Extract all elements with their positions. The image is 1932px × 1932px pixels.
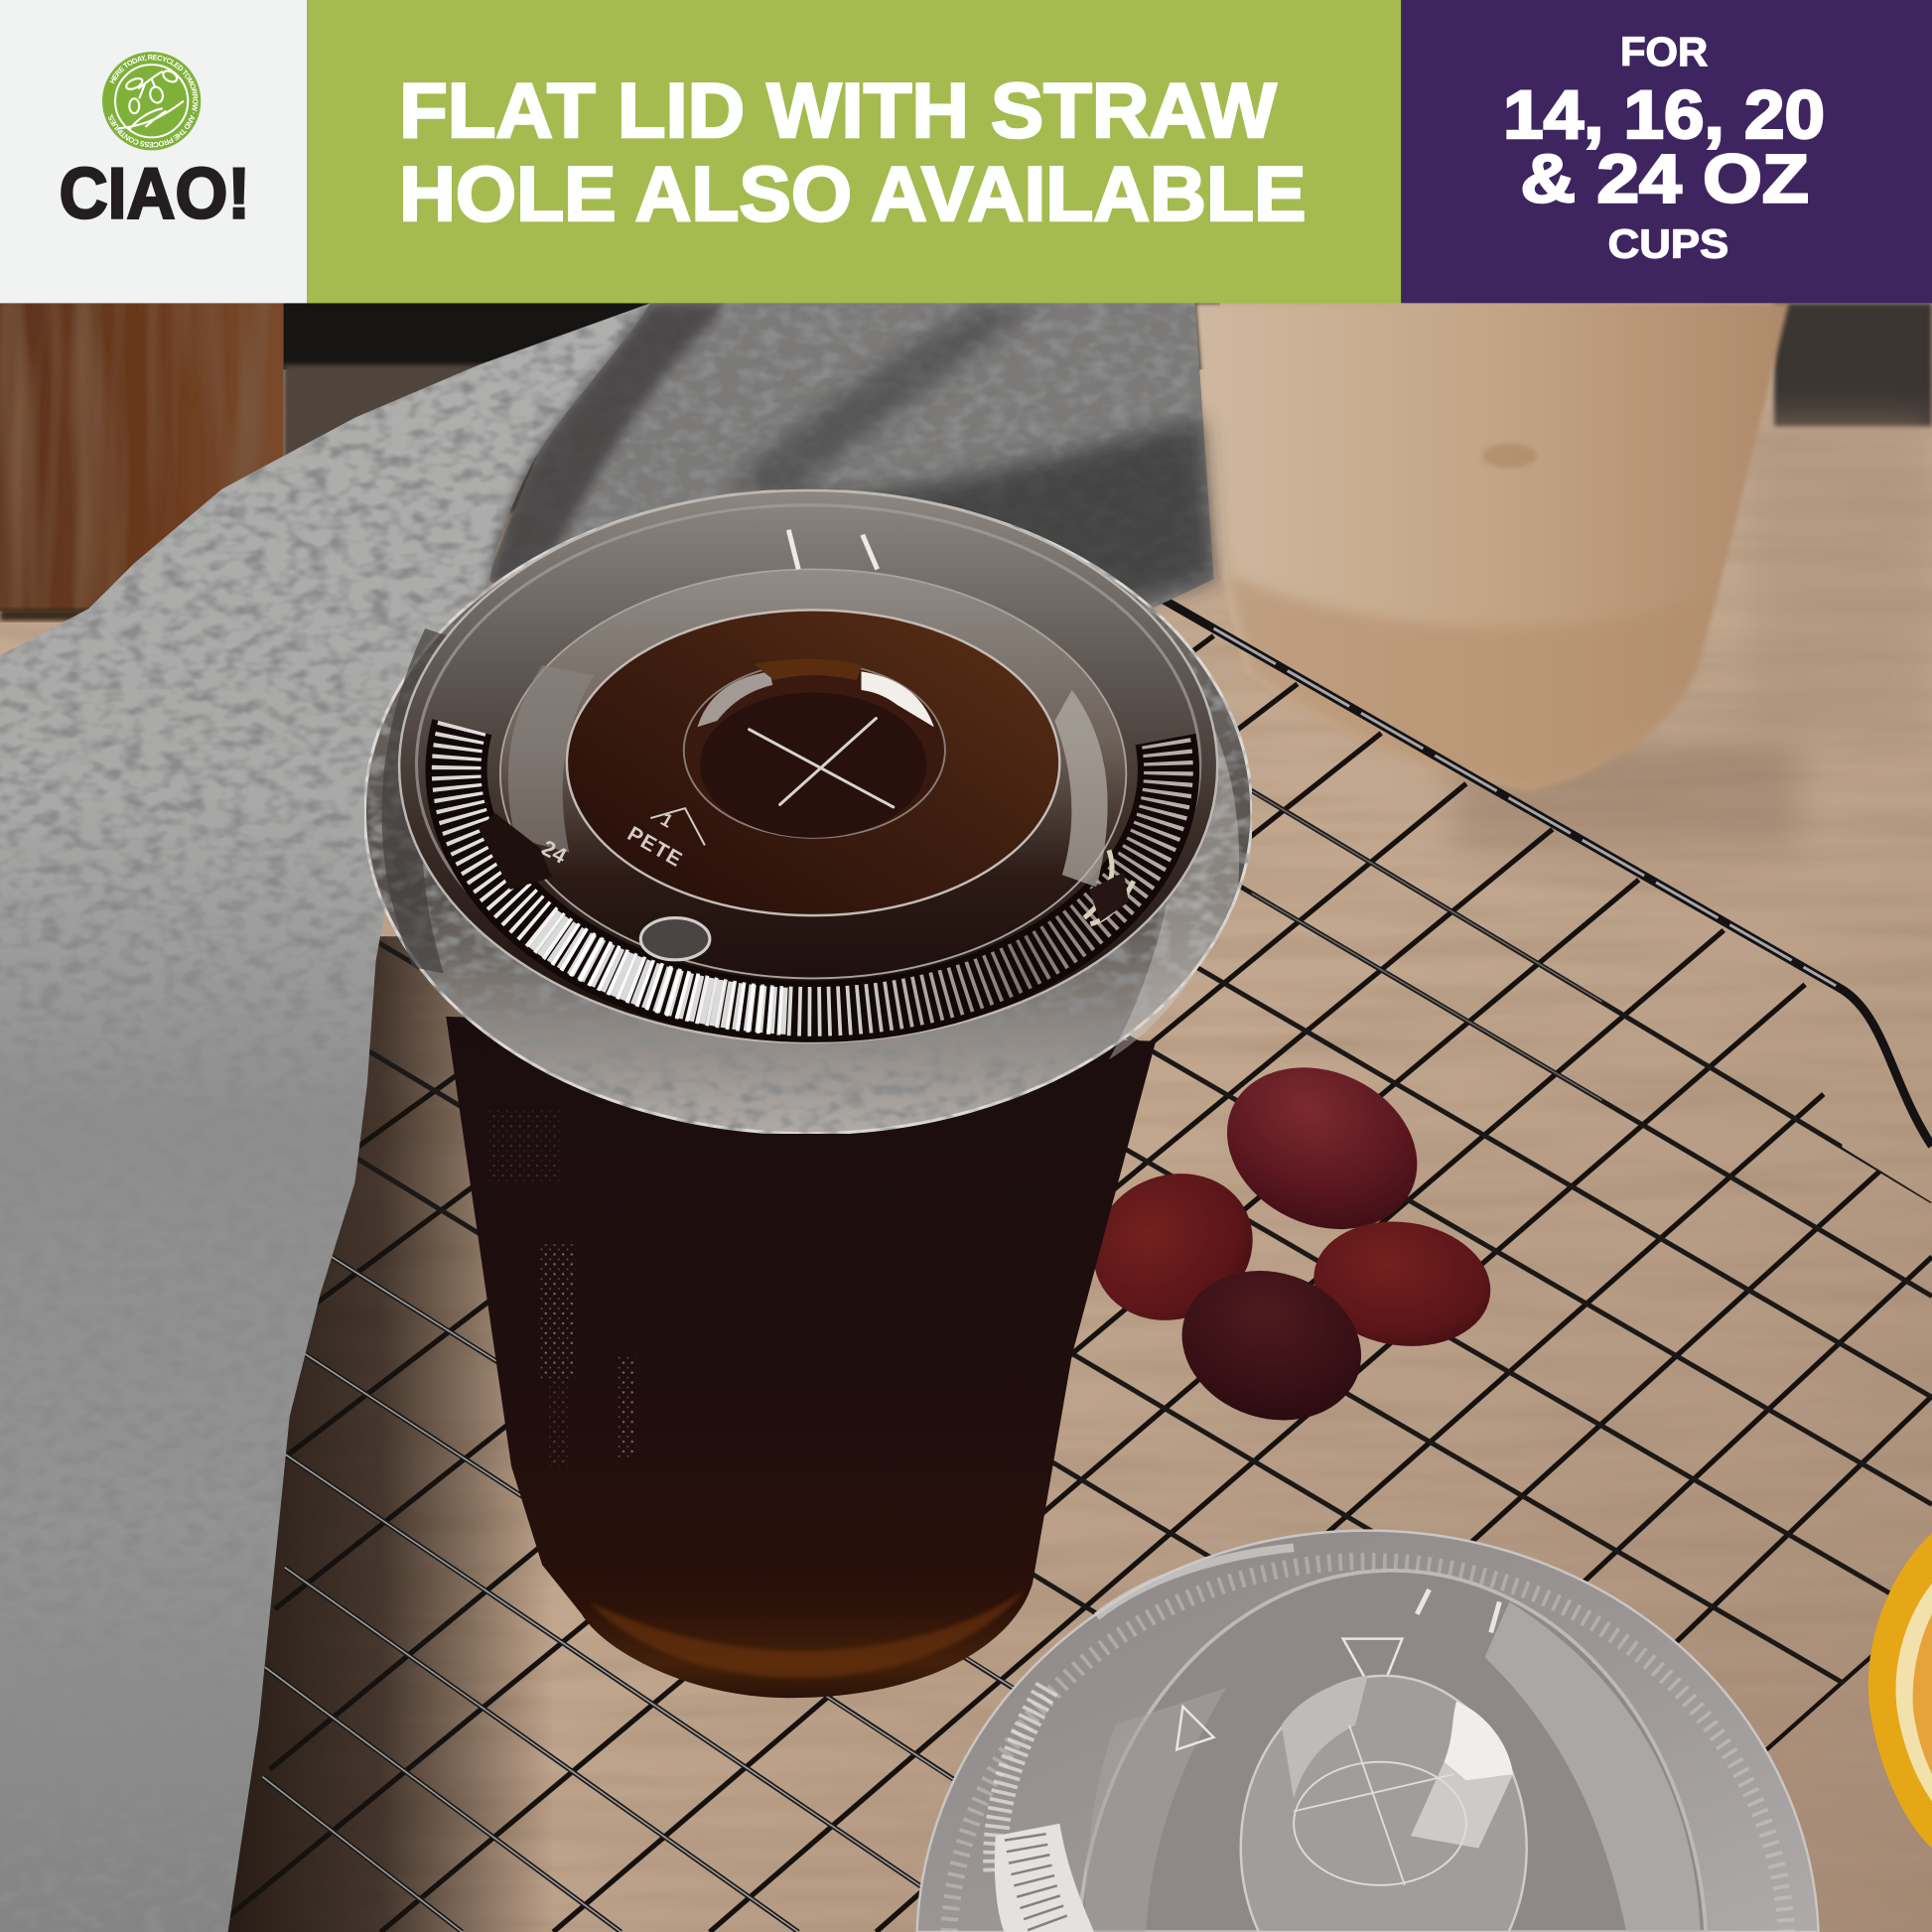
rack cross wires bbox=[229, 588, 1932, 1932]
recessed centre bbox=[1079, 1571, 1706, 1932]
straw dome bbox=[1241, 1676, 1527, 1932]
rack wire highlights bbox=[262, 791, 1601, 1932]
back towel shadow folds bbox=[727, 303, 1035, 505]
panel: cup sizes bbox=[1401, 0, 1932, 303]
right streaks bbox=[1484, 1601, 1701, 1932]
shadow beside the towel bbox=[209, 936, 554, 1932]
lid skirt bbox=[364, 490, 1252, 1134]
recycling mark: 1 bbox=[657, 808, 676, 832]
icon: recycling badge: HERE TODAY, RECYCLED TOMORROW · AND THE PROCESS CONTINUES. bbox=[108, 55, 199, 147]
rack long wires bbox=[261, 788, 1932, 1932]
towel fold shadow bbox=[487, 303, 727, 592]
ring right glare bbox=[1054, 690, 1108, 888]
ribbed channel bbox=[457, 727, 1169, 1012]
flat lid on the cup bbox=[364, 490, 1252, 1134]
lid skirt right glare bbox=[1084, 573, 1239, 1059]
rack outer frame and handle bbox=[1162, 599, 1932, 1146]
outer beaded rim bbox=[949, 1562, 1786, 1932]
straw dimple bbox=[684, 659, 945, 838]
ring left glare bbox=[508, 665, 594, 853]
second lid lying on the rack bbox=[917, 1531, 1819, 1932]
beige iced drink cup bbox=[1195, 303, 1789, 791]
label: cups: CUPS bbox=[1608, 220, 1728, 266]
cup of iced tea bbox=[446, 1017, 1156, 1698]
rim glare bbox=[1097, 1548, 1294, 1616]
headline line 1: FLAT LID WITH STRAW bbox=[399, 67, 1277, 154]
wooden block bbox=[0, 303, 286, 621]
grape right bbox=[1306, 1210, 1498, 1357]
grey knitted towel, front bbox=[0, 303, 650, 1932]
panel: logo bbox=[0, 0, 307, 304]
straw slit X bbox=[750, 719, 894, 807]
grey knitted towel, back fold bbox=[486, 303, 1213, 640]
recessed tea window bbox=[567, 610, 1059, 915]
dome slit lines bbox=[1294, 1725, 1466, 1885]
sizes line 2: & 24 OZ bbox=[1520, 142, 1809, 217]
lid marks bbox=[1176, 1589, 1499, 1749]
recycling mark: 24 bbox=[537, 835, 571, 869]
lid tab details bbox=[479, 530, 1134, 960]
wire cooling rack bbox=[230, 633, 1932, 1932]
header band bbox=[0, 0, 1932, 304]
ribbed edge bbox=[996, 1688, 1047, 1872]
sizes line 1: 14, 16, 20 bbox=[1503, 77, 1825, 153]
inner glass ring bbox=[500, 569, 1126, 978]
grape left bbox=[1069, 1148, 1277, 1346]
lid top surface bbox=[399, 490, 1217, 1042]
grape top bbox=[1200, 1037, 1444, 1259]
label: for: FOR bbox=[1620, 29, 1708, 74]
recycling mark: PETE bbox=[623, 822, 686, 872]
grape bottom bbox=[1163, 1248, 1381, 1443]
headline line 2: HOLE ALSO AVAILABLE bbox=[399, 150, 1307, 237]
lid skirt left shade bbox=[381, 628, 462, 973]
panel: headline bbox=[308, 0, 1401, 303]
rim highlights bbox=[416, 505, 1200, 1023]
grapes bbox=[1069, 1037, 1498, 1443]
condensation droplets bbox=[486, 1109, 635, 1466]
lemon slice bbox=[1868, 1533, 1932, 1849]
recycling mark bbox=[537, 808, 705, 872]
wordmark: CIAO! bbox=[60, 155, 250, 234]
